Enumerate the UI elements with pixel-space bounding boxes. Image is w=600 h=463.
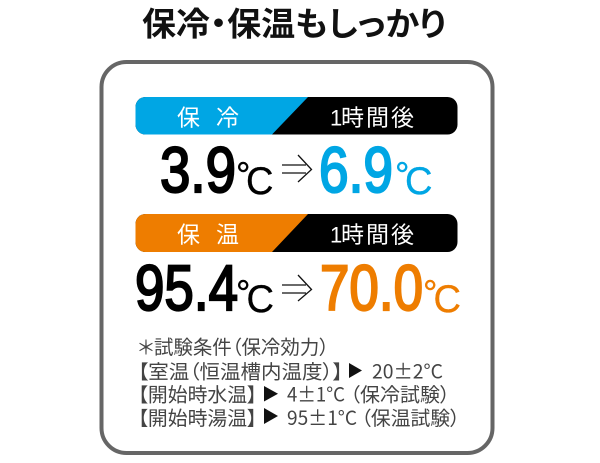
test conditions note: ＊試験条件（保冷効力） xyxy=(138,331,329,360)
test conditions note: 【開始時水温】 xyxy=(138,378,257,408)
readings: cold retention: C xyxy=(246,160,274,203)
readings: cold retention xyxy=(160,134,432,206)
banner: heat retention xyxy=(136,214,458,252)
test conditions note: 【室温（恒温槽内温度）】 xyxy=(138,356,343,384)
readings: heat retention: ° xyxy=(236,272,250,313)
banner: cold retention: 1 xyxy=(330,106,342,130)
arrow: cold change xyxy=(282,155,312,182)
banner: heat retention: 時間後 xyxy=(341,216,414,250)
banner: heat retention: 1 xyxy=(330,222,342,248)
readings: cold retention: 3.9 xyxy=(160,134,236,206)
readings: heat retention xyxy=(135,252,461,324)
readings: cold retention: C xyxy=(405,160,432,203)
test conditions note: 4±1°C xyxy=(287,378,345,408)
readings: heat retention: C xyxy=(246,278,274,321)
test conditions note: 95±1°C xyxy=(287,402,357,431)
arrow: heat change xyxy=(282,275,312,301)
readings: cold retention: ° xyxy=(236,154,250,195)
readings: heat retention: 95.4 xyxy=(135,252,238,324)
banner: cold retention: 冷 xyxy=(216,98,239,132)
banner: cold retention: 時間後 xyxy=(341,98,414,132)
banner: heat retention: 温 xyxy=(216,216,239,250)
readings: heat retention: ° xyxy=(423,272,437,313)
panel: test results xyxy=(102,62,492,453)
banner: cold retention: 保 xyxy=(177,98,200,132)
test conditions note xyxy=(138,331,460,431)
readings: heat retention: 70.0 xyxy=(320,252,423,324)
banner: heat retention: 保 xyxy=(177,216,200,250)
readings: cold retention: 6.9 xyxy=(319,134,393,206)
test conditions note: 20±2°C xyxy=(372,356,443,384)
test conditions note: （保冷試験） xyxy=(350,378,450,408)
banner: cold retention xyxy=(136,97,458,134)
test conditions note: （保温試験） xyxy=(361,402,460,431)
readings: heat retention: C xyxy=(434,278,461,321)
readings: cold retention: ° xyxy=(395,154,409,195)
test conditions note: 【開始時湯温】 xyxy=(138,402,257,431)
